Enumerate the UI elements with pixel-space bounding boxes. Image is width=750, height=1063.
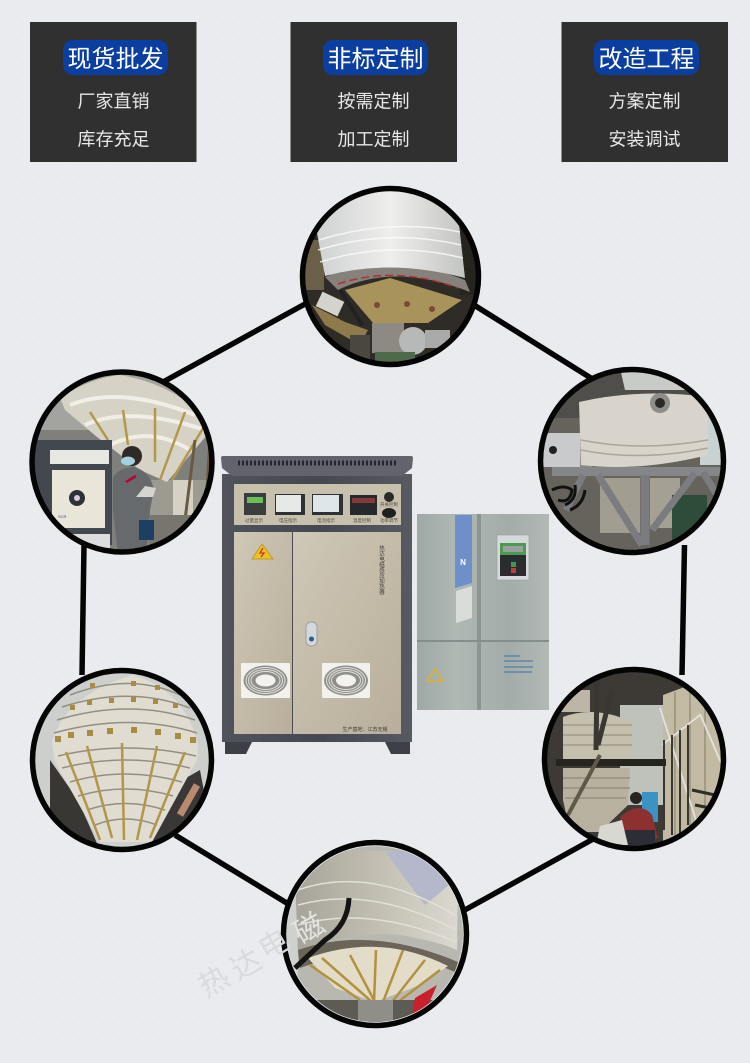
instrument panel: 温度控制 — [353, 517, 371, 524]
watermark text: 磁 — [288, 907, 330, 951]
photo circle: worker beside cabinet and cone: SCR — [58, 514, 67, 519]
vertical product label: 电 — [379, 555, 385, 563]
text: 加工定制: 加工定制 — [338, 130, 410, 150]
blue stripe — [455, 515, 472, 588]
panel: 改造工程 — [562, 22, 728, 162]
photo circle: worker beside cabinet and cone — [25, 370, 220, 555]
panel: 现货批发 — [30, 22, 196, 162]
text: 厂家直销: 厂家直销 — [78, 92, 150, 112]
watermark text: 电 — [253, 923, 295, 967]
small print — [504, 656, 533, 672]
panel: 非标定制 — [290, 22, 457, 162]
text: 按需定制: 按需定制 — [338, 92, 410, 112]
control keypad — [497, 535, 529, 580]
fan right — [322, 663, 370, 698]
feet — [225, 742, 410, 754]
heading pill: 现货批发: 现货批发 — [68, 46, 164, 73]
photo circle: top coil — [300, 185, 482, 370]
photo circle: cone with gold ribs — [27, 669, 219, 851]
heading pill: 非标定制: 非标定制 — [328, 46, 424, 73]
cabinet body — [222, 474, 412, 742]
vertical product label — [379, 544, 385, 596]
photo circle: coil with cable — [282, 840, 469, 1030]
vertical product label: 应 — [379, 572, 385, 580]
watermark text: 达 — [225, 943, 267, 987]
instrument panel: 过量显示 — [245, 517, 263, 524]
cabinet top cap — [221, 456, 413, 476]
text: 库存充足: 库存充足 — [78, 130, 150, 150]
white patch — [456, 586, 472, 623]
vertical product label: 热 — [379, 582, 385, 590]
instrument panel — [234, 484, 401, 525]
watermark text — [193, 907, 330, 1004]
control cabinet — [221, 456, 413, 754]
origin label: 生产基地：江苏无锡 — [342, 726, 388, 733]
vertical product label: 磁 — [379, 560, 385, 568]
instrument panel: 电压指示 — [279, 517, 297, 524]
vertical product label: 热 — [379, 544, 385, 552]
vertical product label: 感 — [379, 566, 385, 574]
instrument panel: 电流指示 — [317, 517, 335, 524]
left door — [234, 532, 292, 734]
vertical product label: 加 — [379, 577, 385, 585]
photo circle: insulated tank on steel frame — [537, 368, 730, 558]
variable frequency unit — [417, 514, 549, 710]
watermark text: 热 — [193, 960, 235, 1004]
vertical product label: 器 — [379, 589, 385, 596]
heading pill: 改造工程: 改造工程 — [598, 46, 694, 73]
variable frequency unit: N — [460, 558, 466, 567]
right door — [293, 532, 401, 734]
instrument panel: 开关控制 — [380, 501, 398, 508]
instrument panel: 功率调节 — [380, 517, 398, 524]
warning triangle — [252, 544, 273, 559]
vertical product label: 达 — [379, 550, 385, 558]
warning triangle — [427, 669, 443, 681]
fan left — [241, 663, 290, 698]
text: 安装调试: 安装调试 — [608, 130, 680, 150]
text: 方案定制: 方案定制 — [608, 92, 680, 112]
hexagon connector lines — [82, 304, 684, 911]
door lock — [306, 622, 317, 646]
photo circle: tanks and staircase — [541, 669, 730, 851]
